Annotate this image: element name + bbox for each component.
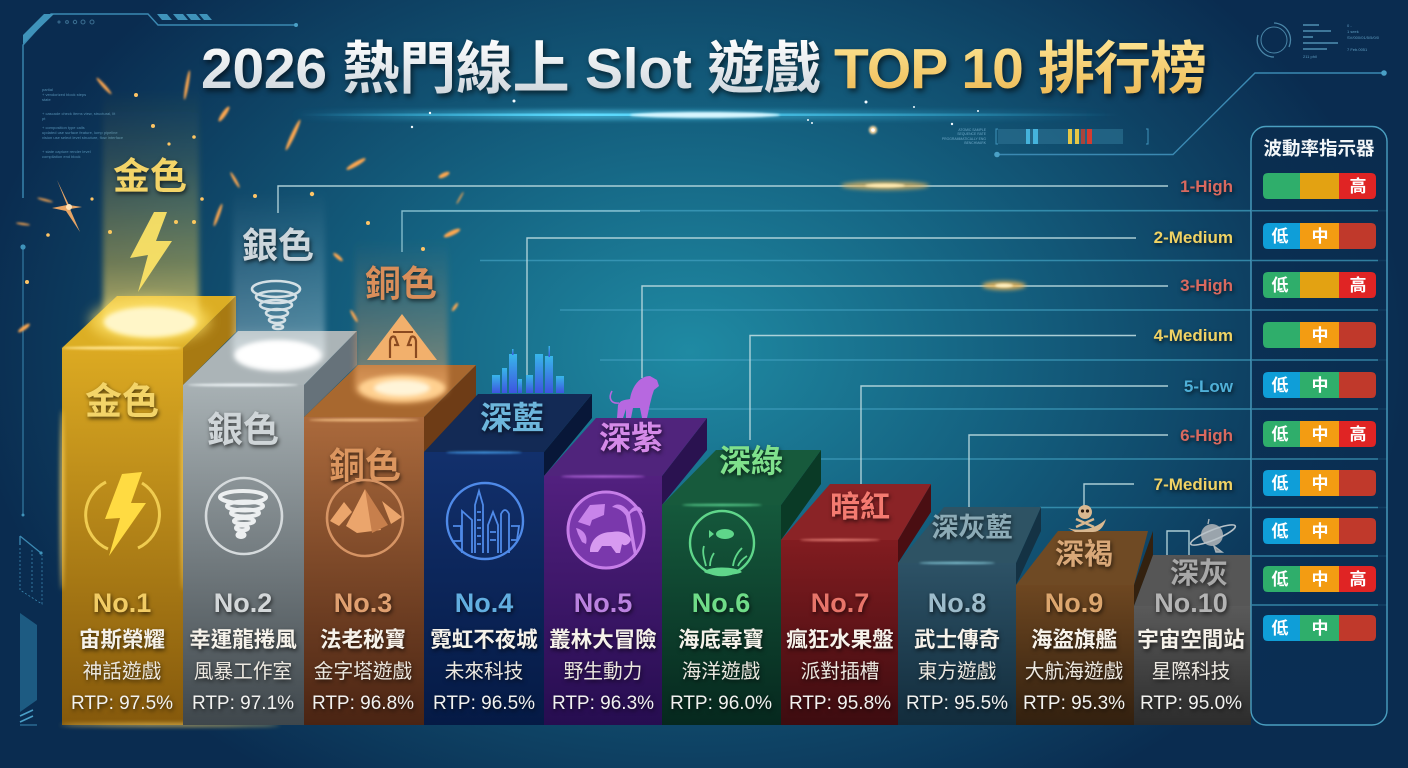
rank text: 宇宙空間站	[1137, 627, 1245, 652]
rank text: 叢林大冒險	[549, 627, 657, 652]
top-left code text: state	[42, 97, 51, 102]
rank text: 瘋狂水果盤	[786, 627, 894, 652]
top-right HUD: 0 -	[1347, 23, 1352, 28]
rank text: 宙斯榮耀	[79, 627, 165, 652]
volatility labels: 1-High	[1180, 177, 1233, 196]
volatility labels	[1154, 177, 1234, 494]
bar 4: deep blue	[424, 346, 592, 725]
top and side faces	[662, 450, 821, 540]
rank text: RTP: 96.5%	[433, 693, 535, 714]
row 10 meter: 低	[1272, 618, 1288, 638]
top-left code text: + cascade check items view, structural, lit	[42, 111, 116, 116]
top-right HUD: 1 seek	[1347, 29, 1359, 34]
rank text: RTP: 95.8%	[789, 693, 891, 714]
colour label: 銅色	[329, 445, 401, 486]
colour label: 銀色	[207, 409, 279, 450]
icon: ocean circle	[690, 511, 754, 575]
row 9 meter: 中	[1312, 570, 1328, 589]
colour label: 暗紅	[830, 491, 890, 524]
decorative horizontal grid lines	[430, 211, 1387, 605]
front face	[898, 563, 1016, 725]
rank text: 武士傳奇	[914, 628, 1000, 652]
top-left code text: vision use select level structure, flow interface	[42, 135, 124, 140]
bar 6: deep green	[662, 443, 821, 725]
rank text: RTP: 96.3%	[552, 693, 654, 714]
sparks	[16, 70, 464, 334]
light beam	[233, 190, 325, 371]
rank text: 金字塔遊戲	[314, 661, 412, 683]
rank text: 星際科技	[1152, 661, 1230, 683]
bar 1: gold	[60, 90, 280, 726]
top and side faces	[898, 507, 1041, 585]
rank text	[549, 588, 657, 714]
row 7 meter: 低	[1272, 473, 1288, 493]
rank text: RTP: 96.0%	[670, 693, 772, 714]
row 2 meter	[1263, 223, 1376, 249]
row 9 meter: 高	[1350, 569, 1366, 589]
rank text	[189, 588, 297, 714]
rank text	[71, 588, 173, 714]
rank text: 東方遊戲	[918, 661, 996, 683]
rank text: 海底尋寶	[678, 628, 764, 652]
rank text	[430, 588, 538, 714]
top face	[1134, 555, 1251, 606]
rank text: No.9	[1045, 588, 1103, 618]
front face	[1016, 585, 1134, 725]
title	[201, 37, 1207, 101]
row 6 meter	[1263, 421, 1376, 447]
barcode gauge: ATOMIC SAMPLE	[958, 128, 987, 132]
rank text	[1023, 588, 1125, 714]
rank text	[906, 588, 1008, 714]
top and side faces	[1016, 531, 1153, 606]
icon: lightning above	[130, 212, 172, 292]
front face	[183, 385, 304, 725]
colour label: 深灰	[1170, 557, 1228, 590]
bar 9: dark brown	[1016, 505, 1153, 725]
colour label: 深綠	[719, 443, 783, 479]
top-left code text: partial	[42, 87, 53, 92]
rank text: RTP: 97.5%	[71, 693, 173, 714]
bar 8: dark slate blue	[898, 507, 1041, 725]
rank text: 霓虹不夜城	[430, 627, 538, 652]
colour label above: 金色	[113, 156, 187, 197]
volatility labels: 5-Low	[1184, 377, 1234, 396]
rank text: 未來科技	[445, 661, 523, 683]
connector lines to volatility labels	[278, 186, 1189, 556]
row 8 meter: 中	[1312, 522, 1328, 541]
rank text: RTP: 95.5%	[906, 693, 1008, 714]
row 6 meter: 低	[1272, 424, 1288, 444]
top and side faces	[183, 331, 357, 417]
rank text: 野生動力	[564, 661, 642, 683]
rank text: 風暴工作室	[194, 661, 292, 683]
panel heading: 波動率指示器	[1263, 138, 1375, 159]
rank text: No.8	[928, 588, 986, 618]
icon: pyramid circle	[327, 480, 403, 556]
row 10 meter: 中	[1312, 619, 1328, 638]
rank text	[786, 588, 894, 714]
top and side faces	[62, 296, 236, 385]
colour label above: 銅色	[365, 263, 437, 304]
rank text: 派對插槽	[801, 661, 879, 683]
rank text: No.3	[334, 588, 392, 618]
title: TOP 10 排行榜	[834, 37, 1207, 101]
top-left code text: + composition type calls	[42, 125, 85, 130]
top and side faces	[424, 394, 592, 476]
rank text	[670, 588, 772, 714]
bar 3: bronze	[304, 240, 476, 725]
front face	[424, 452, 544, 725]
rank text: No.1	[93, 588, 151, 618]
bar 10: dark grey	[1134, 519, 1251, 725]
front face	[62, 348, 183, 725]
row 8 meter	[1263, 518, 1376, 544]
colour label: 深紫	[599, 420, 663, 456]
barcode gauge: PROGRAMMATICALLY ENG	[942, 137, 986, 141]
rank text: No.2	[214, 588, 272, 618]
bottom-left HUD circuit	[20, 536, 43, 725]
row 10 meter	[1263, 615, 1376, 641]
row 3 meter: 低	[1272, 275, 1288, 295]
icon: saturn	[1189, 519, 1237, 552]
row 9 meter: 低	[1272, 569, 1288, 589]
row 5 meter: 中	[1312, 376, 1328, 395]
rank text: 幸運龍捲風	[189, 628, 297, 652]
barcode gauge	[942, 128, 1148, 145]
rank text: RTP: 96.8%	[312, 693, 414, 714]
left HUD line	[20, 244, 26, 516]
light beam	[355, 240, 448, 403]
top-right HUD	[1257, 23, 1380, 59]
top-left code text	[42, 87, 124, 159]
top-right HUD: SV/000/01/5/5/0/0	[1347, 35, 1380, 40]
front face	[1134, 606, 1251, 725]
bar 2: silver	[183, 190, 357, 725]
row 1 meter: 高	[1350, 176, 1366, 196]
volatility labels: 3-High	[1180, 276, 1233, 295]
bar 7: dark red	[781, 484, 931, 725]
rank text: 大航海遊戲	[1025, 661, 1123, 683]
icon: skyline above	[492, 346, 564, 393]
top and side faces	[544, 418, 707, 505]
volatility labels: 6-High	[1180, 426, 1233, 445]
rank text: RTP: 95.0%	[1140, 693, 1242, 714]
panel: volatility indicator	[1251, 126, 1387, 725]
barcode gauge: BENCHMARK	[964, 141, 987, 145]
row 7 meter: 中	[1312, 474, 1328, 493]
colour label: 深藍	[480, 400, 544, 436]
star sparkle	[52, 180, 82, 232]
row 3 meter: 高	[1350, 275, 1366, 295]
volatility labels: 4-Medium	[1154, 326, 1233, 345]
rank text: 海盜旗艦	[1031, 627, 1117, 652]
top-left code text: pt	[42, 116, 46, 121]
panel grid lines	[1252, 211, 1378, 605]
rank text: No.10	[1154, 588, 1228, 618]
top and side faces	[781, 484, 931, 563]
circuit line to volatility panel	[994, 70, 1387, 157]
row 8 meter: 低	[1272, 521, 1288, 541]
top-left code text: compilation end block	[42, 154, 80, 159]
icon: jungle circle	[568, 492, 644, 568]
glowing dots	[25, 93, 425, 284]
row 5 meter	[1263, 372, 1376, 398]
icon: lightning circle	[86, 472, 159, 556]
barcode gauge: SEQUENCE RATE	[957, 132, 987, 136]
front face	[781, 540, 898, 725]
row 9 meter	[1263, 566, 1376, 592]
icon: lion	[610, 376, 659, 418]
rank text: RTP: 95.3%	[1023, 693, 1125, 714]
volatility labels: 2-Medium	[1154, 228, 1233, 247]
title: 2026 熱門線上 Slot 遊戲	[201, 37, 821, 101]
row 7 meter	[1263, 470, 1376, 496]
icon: tornado circle	[206, 478, 282, 554]
row 6 meter: 高	[1350, 424, 1366, 444]
row 4 meter: 中	[1312, 326, 1328, 345]
top and side faces	[304, 365, 476, 452]
row 4 meter	[1263, 322, 1376, 348]
rank text: 神話遊戲	[83, 661, 161, 683]
colour label: 深褐	[1055, 538, 1113, 571]
row 2 meter: 中	[1312, 227, 1328, 246]
top-right HUD: 7 Feb.0051	[1347, 47, 1368, 52]
line flares	[841, 181, 1026, 290]
light beam under title	[290, 100, 1120, 134]
row 2 meter: 低	[1272, 226, 1288, 246]
icon: tornado above	[252, 281, 300, 329]
rank text: No.4	[455, 588, 513, 618]
rank text: No.5	[574, 588, 632, 618]
volatility labels: 7-Medium	[1154, 475, 1233, 494]
rank text: RTP: 97.1%	[192, 693, 294, 714]
top-left HUD frame	[23, 14, 298, 198]
colour label: 深灰藍	[932, 513, 1012, 543]
rank text: 海洋遊戲	[682, 661, 760, 683]
front face	[544, 476, 662, 725]
top-right HUD: 211 phil	[1303, 54, 1317, 59]
icon: pirate skull ship	[1068, 505, 1106, 532]
icon: skyline circle	[447, 483, 523, 559]
light beam	[90, 90, 210, 343]
colour label above: 銀色	[242, 225, 314, 266]
top-left code text: updated use surface feature, lump pipeline	[42, 130, 118, 135]
rank text: No.6	[692, 588, 750, 618]
icon: pyramid sphinx above	[367, 314, 437, 360]
edge glow	[60, 410, 280, 726]
row 3 meter	[1263, 272, 1376, 298]
bar 5: deep purple	[544, 376, 707, 725]
top-left code text: + vendorized block steps	[42, 92, 86, 97]
front face	[662, 505, 781, 725]
colour label: 金色	[85, 381, 159, 422]
row 6 meter: 中	[1312, 425, 1328, 444]
top-left code text: + state capture render level	[42, 149, 91, 154]
rank text: 法老秘寶	[320, 628, 406, 652]
row 5 meter: 低	[1272, 375, 1288, 395]
row 1 meter	[1263, 173, 1376, 199]
front face	[304, 417, 424, 725]
rank text: No.7	[811, 588, 869, 618]
rank text	[1137, 588, 1245, 714]
rank text	[312, 588, 414, 714]
